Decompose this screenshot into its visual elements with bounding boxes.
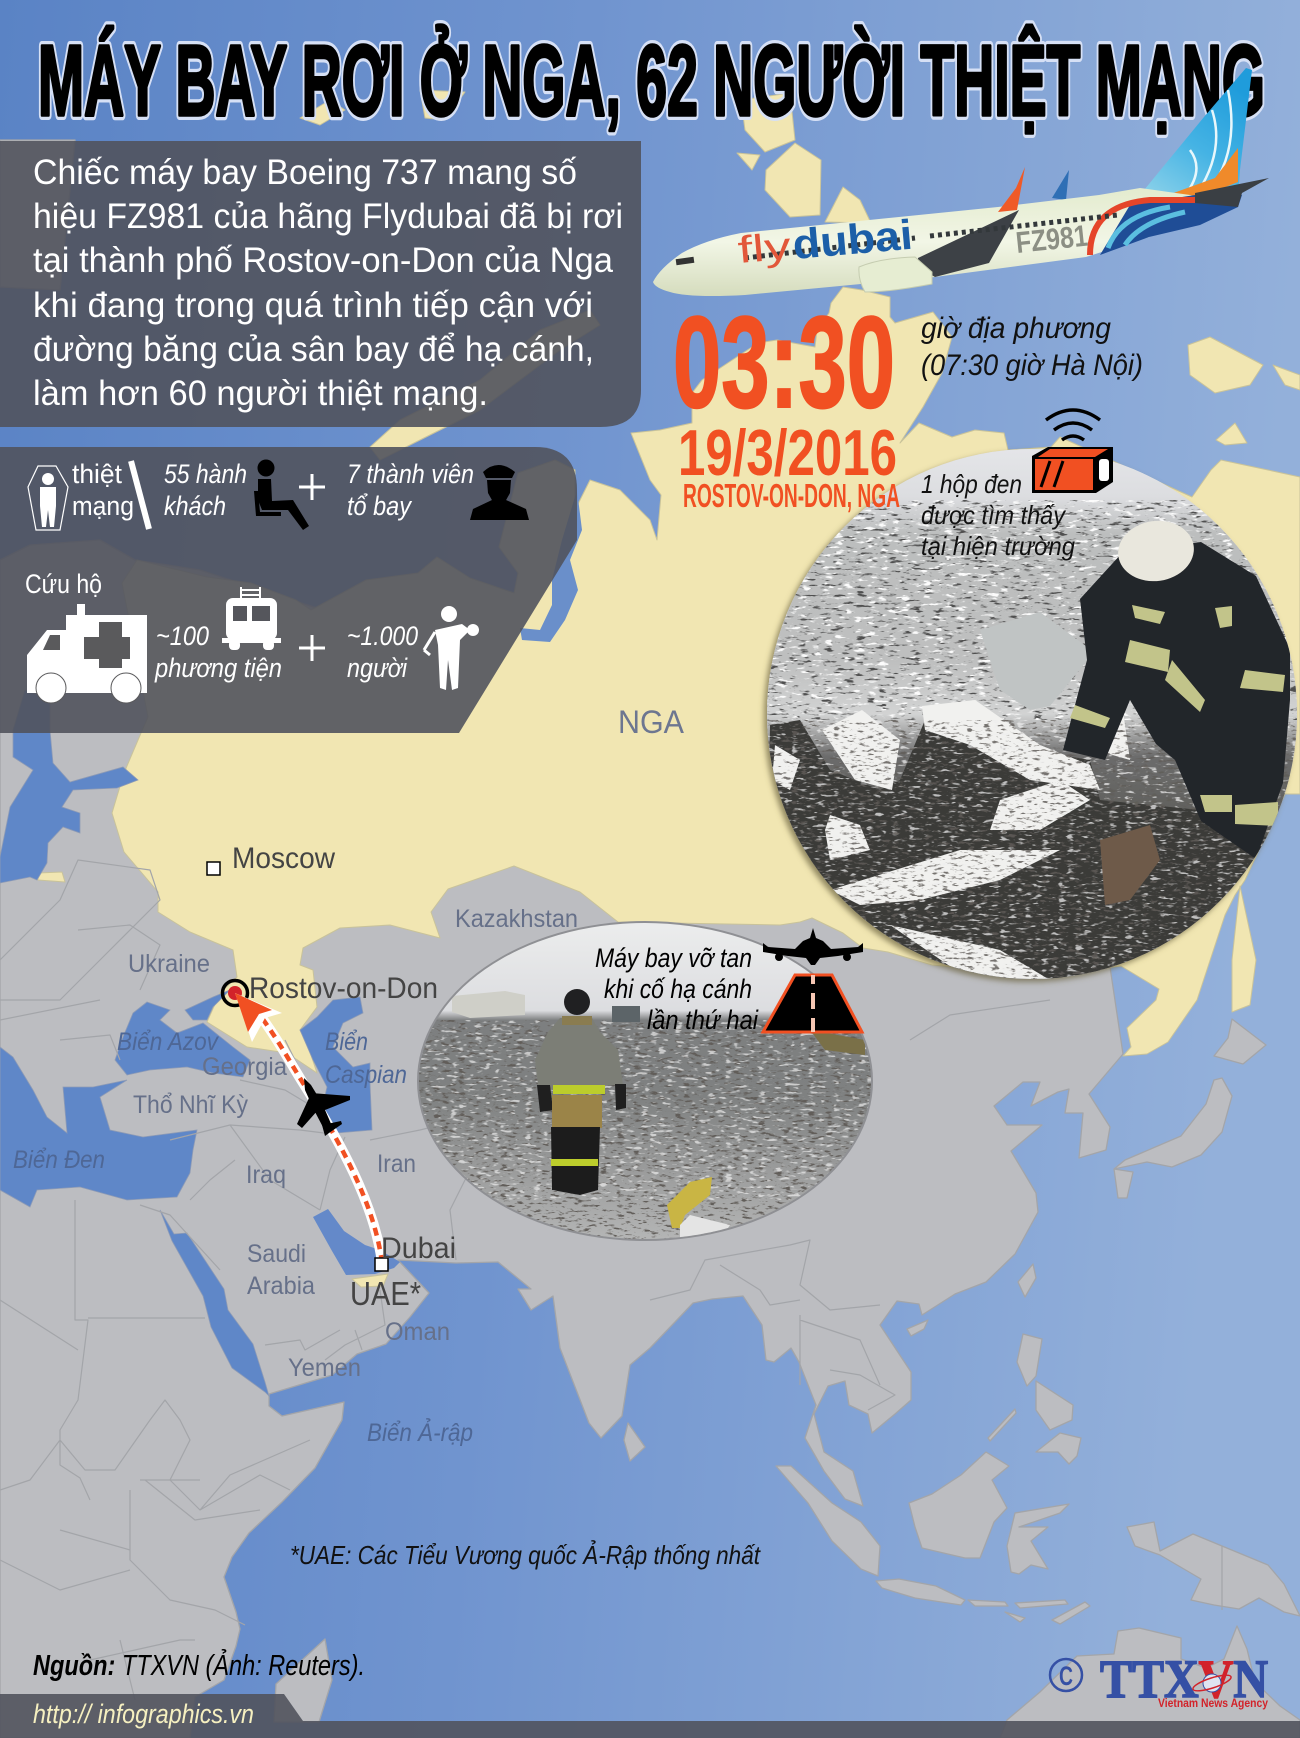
Arctic islands: [300, 90, 1300, 460]
UAE label: UAE*: [350, 1275, 421, 1312]
Saudi Arabia label: Arabia: [247, 1272, 315, 1300]
Philippines: [988, 1334, 1081, 1464]
cockpit window: [676, 257, 694, 265]
icon: coffin: [28, 466, 68, 530]
tail stripes: [1185, 90, 1231, 195]
text: rescuers: [347, 621, 418, 683]
sea: Black Sea: [115, 1002, 250, 1077]
rescuer body: [1063, 542, 1290, 859]
website: http:// infographics.vn: [33, 1699, 254, 1729]
Russia label: NGA: [618, 704, 685, 740]
summary text: Chiếc máy bay Boeing 737 mang số: [33, 153, 577, 192]
reflective stripes: [1070, 605, 1285, 826]
globe emblem: [1191, 1672, 1233, 1694]
FZ981 registration: FZ981: [1014, 220, 1089, 260]
winglet: [998, 167, 1025, 212]
helmet: [564, 989, 590, 1015]
country borders: [0, 860, 1222, 1700]
tail orange: [1168, 148, 1238, 205]
helmet: [1118, 520, 1194, 582]
sea: Persian Gulf: [313, 1209, 400, 1275]
inlet: Ob gulf: [520, 490, 582, 642]
arrowhead: [235, 993, 282, 1042]
Dubai marker: [375, 1258, 388, 1271]
icon: pilot: [470, 465, 529, 520]
photo caption: crash on second landing attempt: [595, 943, 759, 1035]
text: passengers: 55 hành: [164, 459, 247, 489]
Moscow label: Moscow: [232, 842, 335, 875]
plus sign: [299, 635, 325, 661]
text: deaths: mạng: [72, 491, 134, 521]
Taiwan and Hainan: [907, 1264, 1036, 1336]
Turkey label: Thổ Nhĩ Kỳ: [133, 1091, 248, 1119]
text: deaths: thiệt: [72, 459, 122, 489]
summary text: khi đang trong quá trình tiếp cận với: [33, 286, 593, 325]
text: deaths: [72, 459, 134, 521]
source: Nguồn: TTXVN (Ảnh: Reuters).: [33, 1648, 365, 1682]
local time note: [921, 312, 1143, 382]
land: Eurasia and Africa: [0, 540, 1123, 1738]
text: crew: 7 thành viên: [347, 459, 474, 489]
copyright mark: C: [1059, 1661, 1073, 1691]
dubai logo: dubai: [791, 211, 914, 268]
caption: black box found: 1 hộp đen: [921, 469, 1022, 499]
Yemen label: Yemen: [288, 1354, 361, 1382]
rear blue section: [1100, 195, 1242, 255]
Lesser Sunda islands: [968, 1600, 1090, 1624]
Sri Lanka: [624, 1423, 645, 1461]
text: rescuers: ~1.000: [347, 621, 418, 651]
caption: black box found: tại hiện trường: [921, 531, 1075, 561]
land: Svalbard: [0, 140, 75, 290]
firefighter jacket: [535, 1018, 623, 1090]
trousers: [552, 1095, 602, 1128]
caption: black box found: được tìm thấy: [921, 500, 1067, 530]
debris dark mass: [767, 720, 1297, 980]
tail fin: [1140, 68, 1252, 195]
Iran label: Iran: [377, 1150, 416, 1178]
far winglet: [1052, 170, 1069, 200]
Russia: [112, 287, 1300, 1073]
truck: [452, 991, 525, 1018]
Rostov label: Rostov-on-Don: [249, 972, 438, 1005]
Japan: [1114, 1019, 1266, 1198]
text: rescue heading: Cứu hộ: [25, 569, 102, 599]
title: [38, 25, 1265, 137]
teal swirl: [1108, 207, 1185, 248]
Arabian Sea label: Biển Ả-rập: [367, 1416, 473, 1447]
UAE: [352, 1274, 388, 1287]
brown debris: [1100, 825, 1160, 905]
yellow debris: [667, 1177, 712, 1228]
Iraq label: Iraq: [246, 1161, 286, 1189]
snow patches: [772, 690, 1130, 980]
summary text: làm hơn 60 người thiệt mạng.: [33, 374, 488, 413]
logo wordmark: TTXVN: [1100, 1649, 1268, 1709]
bottom bar: [0, 1694, 1300, 1738]
cabin windows: [745, 215, 1118, 258]
photo: rescuer among debris: [767, 449, 1297, 980]
text: passengers: [164, 459, 247, 521]
text: vehicles: [154, 621, 282, 683]
tagline: Vietnam News Agency: [1158, 1698, 1269, 1710]
distant people: [612, 1006, 640, 1022]
sea: Red Sea: [160, 1210, 269, 1396]
wreck far right: [812, 1034, 865, 1055]
sea: Caspian: [300, 997, 372, 1133]
summary text: hiệu FZ981 của hãng Flydubai đã bị rơi: [33, 197, 623, 236]
hi-vis belt: [553, 1085, 605, 1094]
leg stripes: [551, 1159, 598, 1166]
Black Sea label: Biển Đen: [13, 1146, 105, 1174]
icon: rescuer carrying person: [424, 606, 479, 690]
photo caption: crash on second landing attempt: Máy bay vỡ tan: [595, 943, 752, 973]
Moscow marker: [207, 862, 220, 875]
location: ROSTOV-ON-DON, NGA: [683, 477, 900, 514]
photo: firefighter on crash site: [417, 921, 873, 1241]
Rostov marker: [222, 980, 248, 1006]
text: crew: [347, 459, 474, 521]
sea: Mediterranean: [0, 1047, 197, 1207]
legs: [551, 1127, 600, 1195]
icon: signal waves: [1046, 410, 1100, 440]
text: vehicles: phương tiện: [154, 653, 282, 683]
plus sign: [299, 474, 325, 500]
engine: [859, 257, 932, 292]
collar: [562, 1016, 592, 1025]
local time note: giờ địa phương: [921, 312, 1111, 345]
wreck plate: [980, 612, 1094, 710]
Madagascar: [274, 1639, 332, 1722]
Oman label: Oman: [385, 1318, 450, 1346]
horizontal stabilizer: [1195, 178, 1269, 207]
summary text: đường băng của sân bay để hạ cánh,: [33, 330, 594, 369]
icon: runway: [763, 975, 862, 1032]
summary text: [33, 153, 623, 413]
route white path: [262, 1018, 382, 1263]
wing: [918, 210, 1019, 277]
Indonesia and New Guinea: [776, 1452, 1300, 1616]
Saudi Arabia label: Saudi: [247, 1240, 306, 1268]
photo caption: crash on second landing attempt: khi cố hạ cánh: [604, 974, 752, 1004]
text: passengers: khách: [164, 491, 226, 521]
summary text: tại thành phố Rostov-on-Don của Nga: [33, 241, 614, 280]
orange swoosh: [1090, 200, 1200, 255]
slash divider: [131, 461, 149, 529]
text: rescuers: người: [347, 653, 408, 683]
footnote: *UAE: Các Tiểu Vương quốc Ả-Rập thống nhất: [290, 1539, 762, 1570]
fly logo: fly: [736, 226, 793, 272]
icon: black box: [1032, 447, 1113, 493]
Ukraine label: Ukraine: [128, 950, 210, 978]
text: vehicles: ~100: [156, 621, 209, 651]
sea: Azov: [185, 990, 230, 1020]
logo: TTXVN: [1050, 1649, 1269, 1710]
Australia: [1000, 1626, 1300, 1738]
Kaliningrad: [38, 872, 65, 882]
white debris: [680, 1215, 730, 1240]
Caspian label: Caspian: [325, 1061, 407, 1089]
icon: seated passenger: [254, 460, 309, 530]
Dubai label: Dubai: [381, 1232, 456, 1265]
route dashed line: [262, 1018, 382, 1263]
Caspian label: [325, 1028, 407, 1089]
icon: plane on route: [297, 1078, 350, 1136]
Kazakhstan label: Kazakhstan: [455, 905, 578, 933]
map labels: [13, 704, 685, 1447]
Azov label: Biển Azov: [117, 1028, 219, 1056]
Georgia label: Georgia: [202, 1053, 287, 1081]
gloves: [537, 1084, 626, 1112]
text: crew: tổ bay: [347, 491, 412, 521]
photo caption: crash on second landing attempt: lần thứ hai: [647, 1005, 759, 1035]
caption: black box found: [921, 469, 1075, 561]
icon: fire truck: [222, 587, 281, 650]
fuselage: [653, 188, 1215, 296]
panel: summary: [0, 141, 641, 427]
icon: ambulance: [27, 604, 147, 703]
Saudi Arabia label: [247, 1240, 315, 1300]
flydubai airliner: [653, 68, 1269, 296]
local time note: (07:30 giờ Hà Nội): [921, 349, 1143, 382]
flight route Dubai to Rostov-on-Don: [222, 980, 388, 1271]
Caspian label: Biển: [325, 1028, 368, 1056]
copyright mark: [1050, 1659, 1082, 1691]
Sakhalin: [1232, 886, 1256, 1012]
time of crash: 03:30: [673, 289, 895, 435]
icon: landing plane: [763, 928, 863, 965]
date: 19/3/2016: [678, 416, 897, 489]
sea: Baltic: [0, 690, 138, 883]
panel: casualties and rescue: [0, 447, 577, 733]
